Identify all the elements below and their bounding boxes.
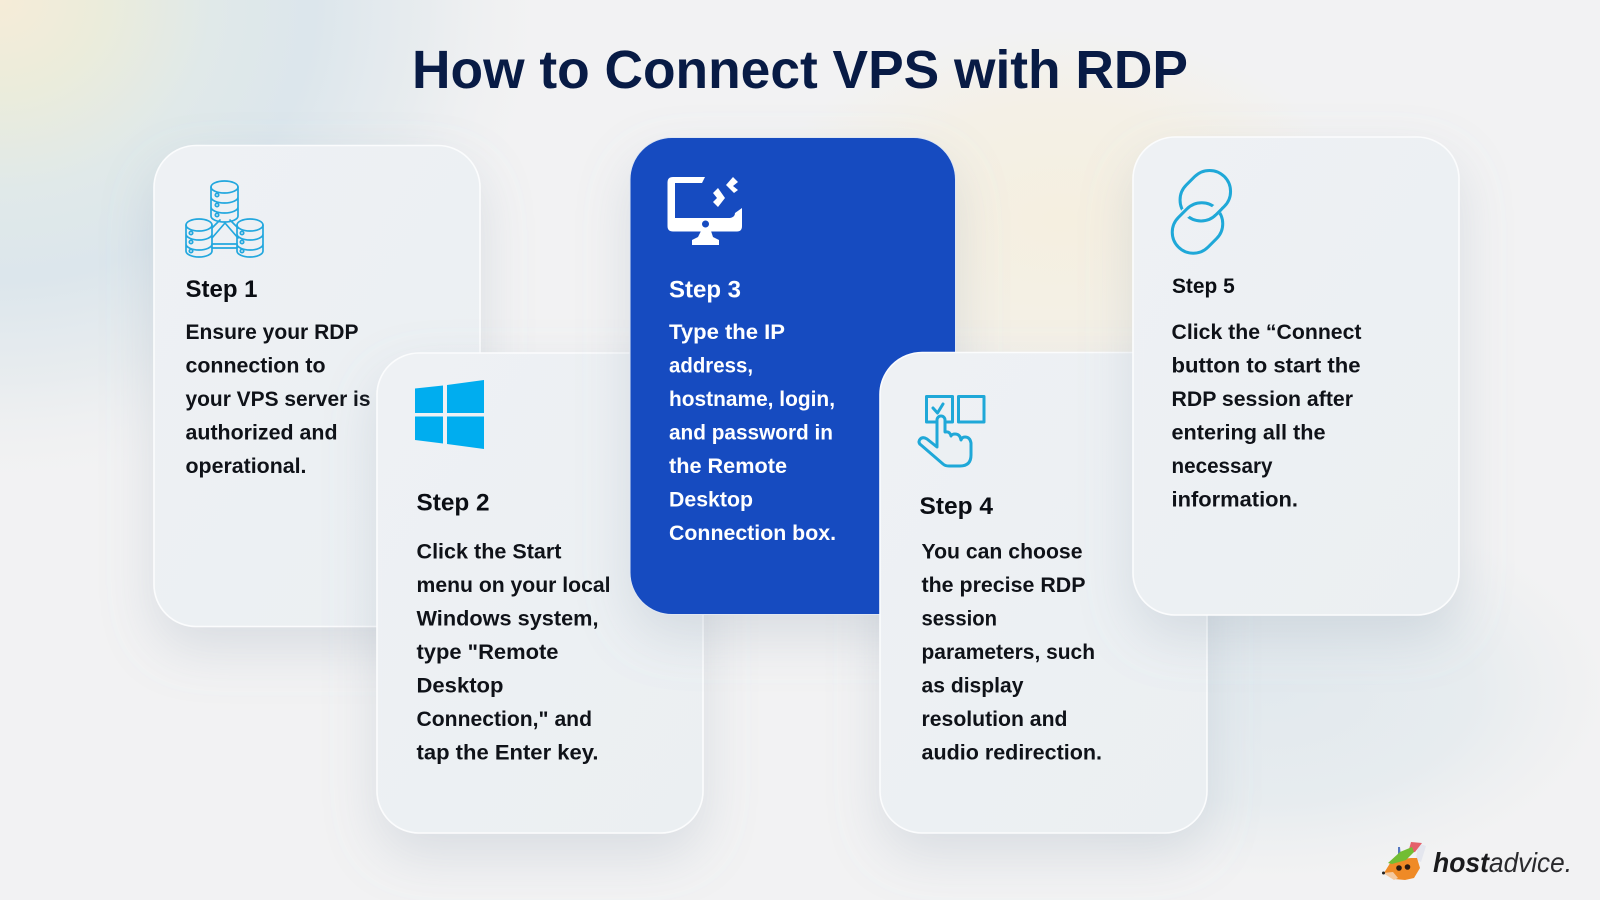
text: step 4 body: as display (922, 674, 1024, 698)
text: step 2 body: Windows system, (416, 608, 598, 630)
text: step 3 body (669, 321, 836, 545)
text: step 1 body: authorized and (186, 422, 338, 444)
text: step 1 body: connection to (186, 354, 326, 378)
text: step 1 body: Ensure your RDP (186, 321, 358, 344)
text: step 4 body (922, 540, 1102, 764)
logo: hostadvice (1382, 842, 1572, 880)
text: step 2 body: Click the Start (416, 540, 562, 564)
heading: step 2: Step 2 (416, 490, 490, 516)
icon: fox mascot (1382, 842, 1426, 880)
text: wordmark: host (1433, 847, 1491, 878)
text: step 5 body: entering all the (1172, 422, 1326, 444)
text: step 3 body: address, (669, 354, 753, 378)
icon: monitor (668, 177, 742, 245)
text: step 5 body: information. (1172, 488, 1298, 512)
heading: step 5: Step 5 (1172, 274, 1235, 298)
text: step 2 body: tap the Enter key. (416, 742, 598, 764)
text: step 5 body: button to start the (1172, 354, 1360, 378)
text: step 2 body: Connection," and (416, 708, 592, 731)
text: step 3 body: and password in (669, 422, 833, 444)
heading: step 1: Step 1 (186, 276, 258, 303)
text: step 3 body: the Remote (669, 455, 787, 478)
text: step 4 body: the precise RDP (922, 574, 1086, 597)
text: step 4 body: parameters, such (922, 641, 1095, 664)
text: step 3 body: Connection box. (669, 522, 836, 545)
text: step 4 body: audio redirection. (922, 742, 1102, 764)
text: wordmark: advice. (1489, 847, 1572, 878)
text: step 3 body: hostname, login, (669, 388, 835, 411)
title: How to Connect VPS with RDP (412, 40, 1188, 100)
text: step 5 body (1172, 321, 1362, 512)
text: step 1 body: your VPS server is (186, 388, 370, 411)
text: step 1 body (186, 321, 370, 478)
text: wordmark (1433, 847, 1572, 878)
text: step 5 body: Click the “Connect (1172, 321, 1362, 344)
text: step 1 body: operational. (186, 455, 306, 478)
panel: step 2 (377, 353, 703, 833)
icon: database cluster (186, 181, 263, 257)
text: step 3 body: Type the IP (669, 321, 785, 344)
icon: chain links (1170, 169, 1232, 255)
panel: step 3 (630, 138, 956, 614)
heading: step 3: Step 3 (669, 276, 741, 304)
text: step 5 body: RDP session after (1172, 388, 1353, 411)
text: step 5 body: necessary (1172, 455, 1273, 478)
text: step 4 body: You can choose (922, 540, 1082, 564)
panel: step 5 (1133, 137, 1459, 615)
text: step 4 body: session (922, 608, 997, 630)
icon: windows logo (415, 380, 484, 449)
text: step 2 body (416, 540, 610, 764)
text: step 2 body: type "Remote (416, 641, 558, 664)
text: step 2 body: menu on your local (416, 574, 610, 597)
panel: step 1 (154, 146, 480, 626)
panel: step 4 (880, 352, 1207, 833)
icon: hand selecting checkbox (919, 396, 984, 466)
heading: step 4: Step 4 (920, 493, 994, 520)
text: step 2 body: Desktop (416, 674, 504, 698)
text: step 4 body: resolution and (922, 708, 1068, 731)
text: step 3 body: Desktop (669, 488, 753, 512)
